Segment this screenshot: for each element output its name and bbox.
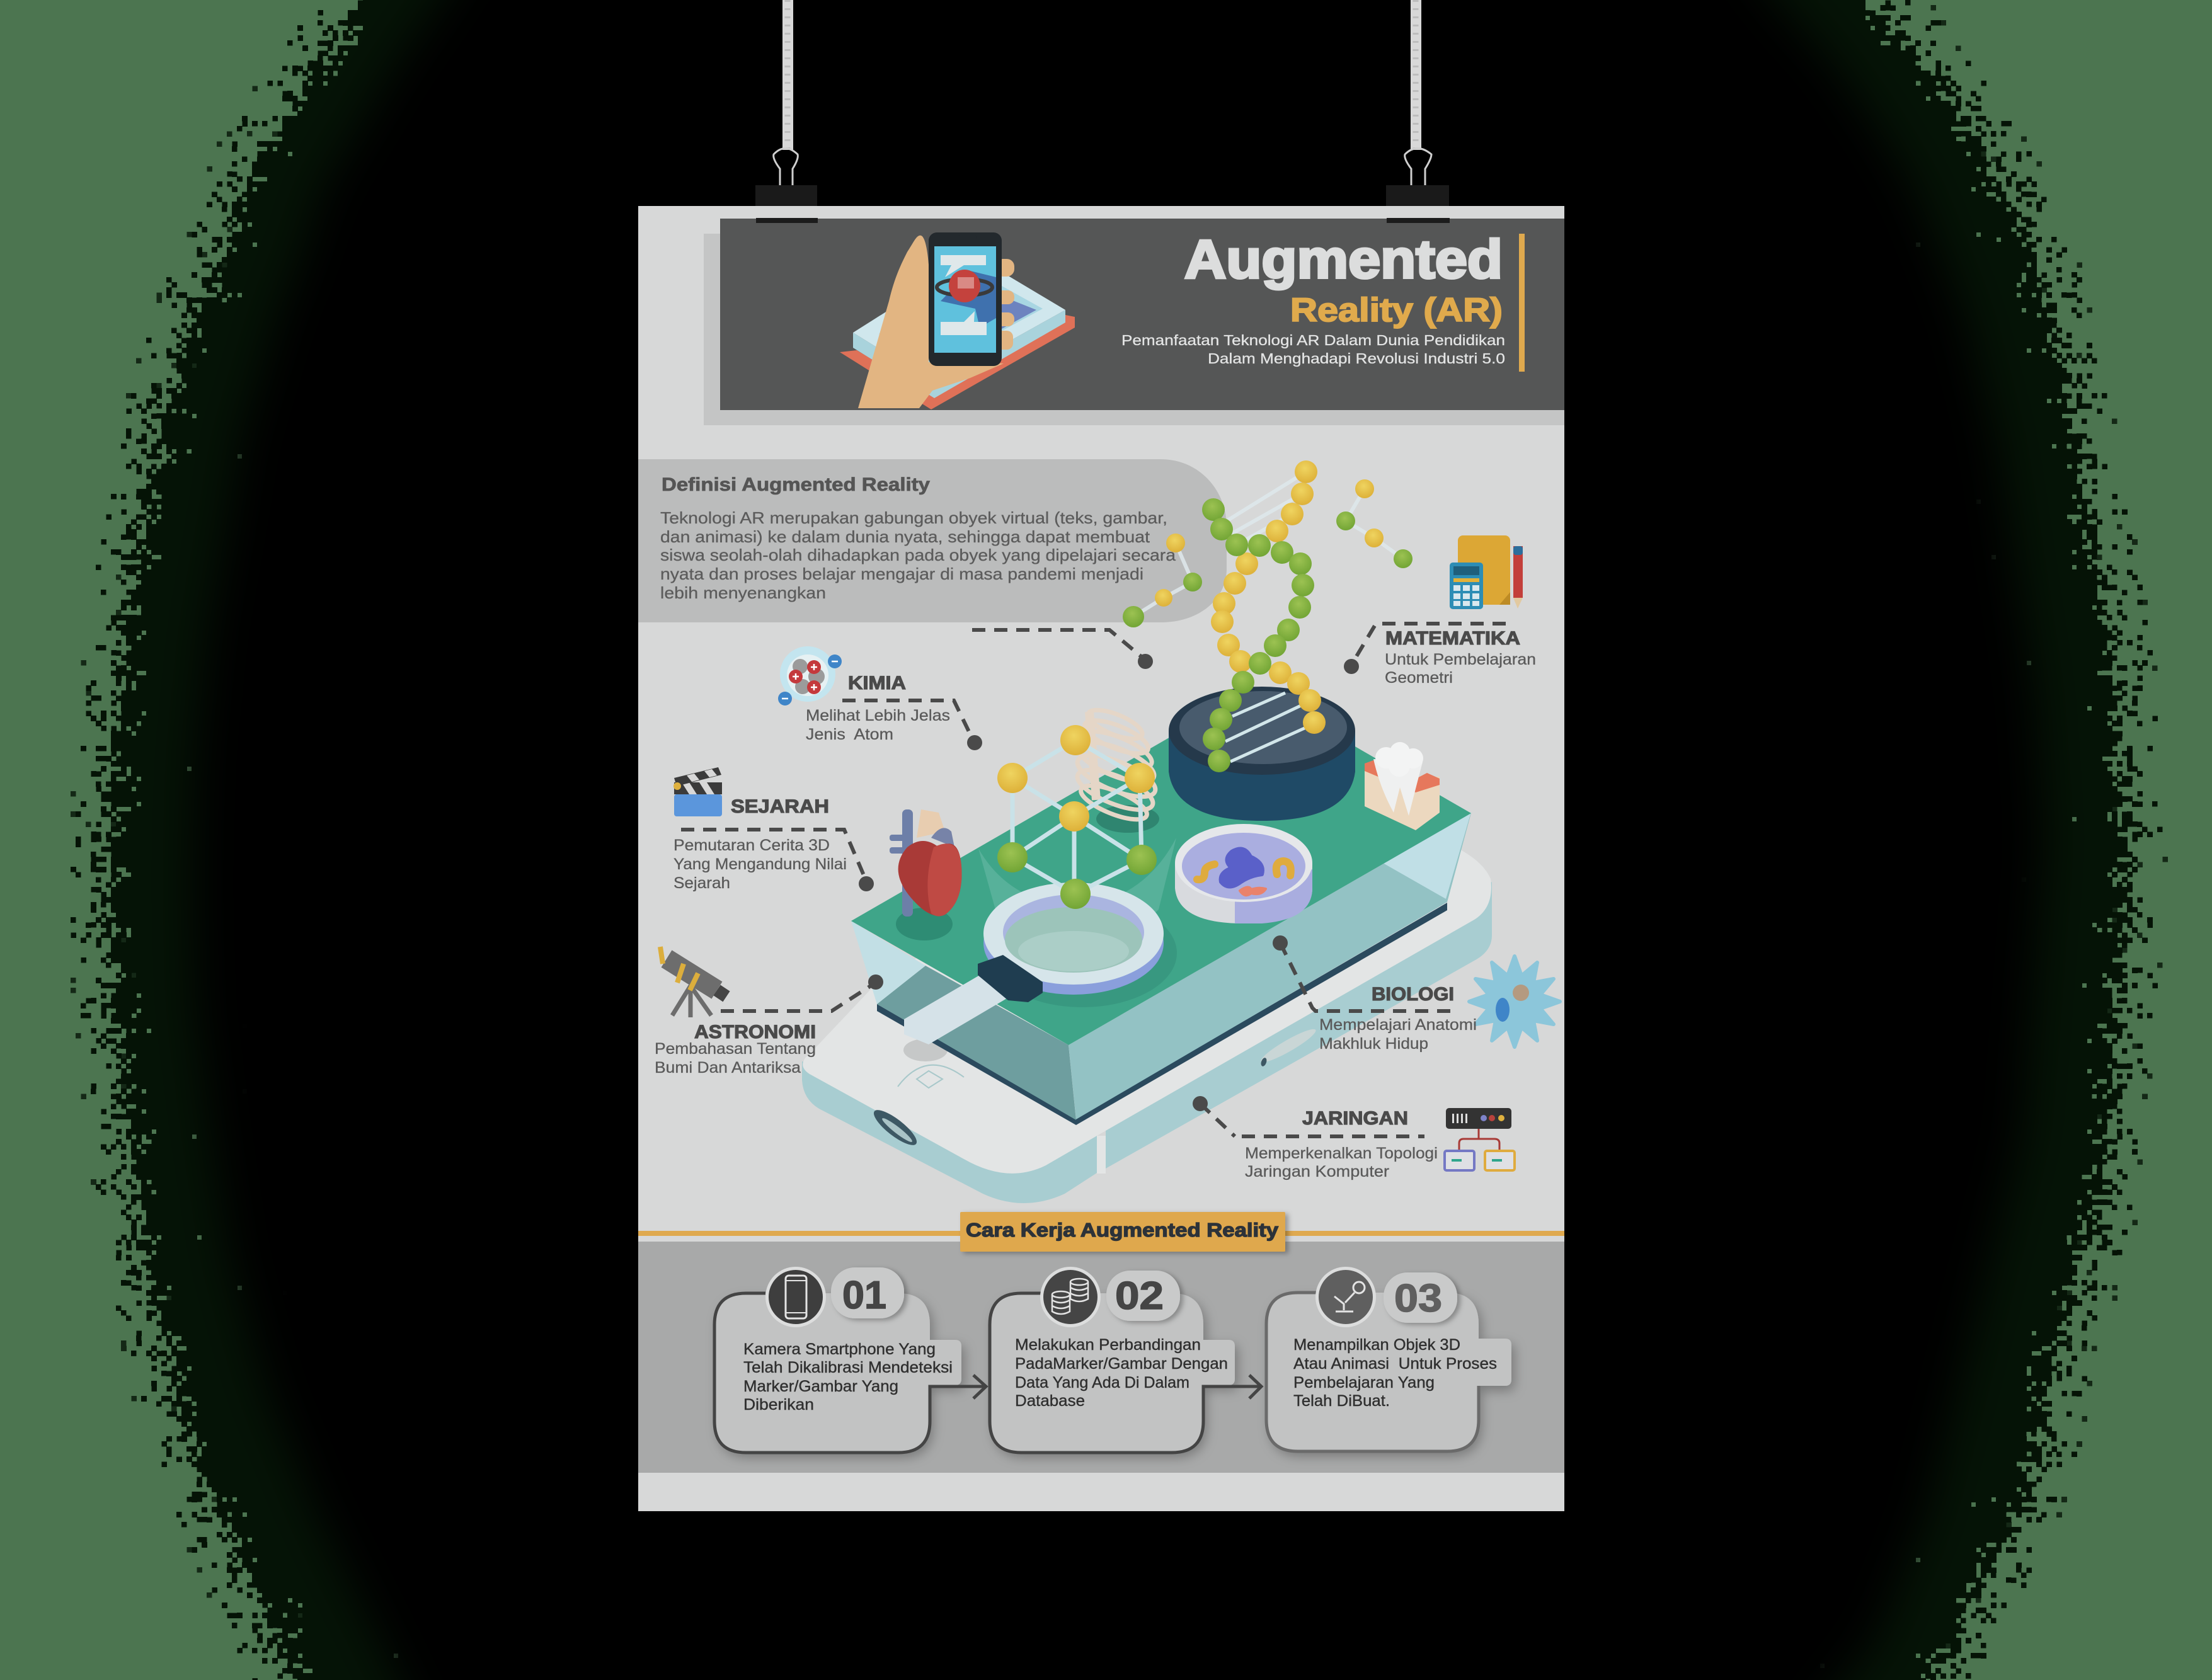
title: Dalam Menghadapi Revolusi Industri 5.0 <box>1208 350 1505 367</box>
icon: amoeba cell <box>1469 956 1560 1047</box>
icon: telescope <box>660 947 726 1017</box>
label: matematika: MATEMATIKA <box>1385 628 1520 649</box>
label: biologi: Makhluk Hidup <box>1319 1035 1428 1053</box>
label: sejarah: Yang Mengandung Nilai <box>673 855 847 873</box>
panel: definition of AR: siswa seolah-olah dihadapkan pada obyek yang dipelajari secara <box>660 546 1176 564</box>
label: astronomi: Pembahasan Tentang <box>655 1040 816 1058</box>
label: sejarah: Sejarah <box>673 874 730 892</box>
poster sheet <box>638 206 1564 1511</box>
smartphone body <box>802 750 1492 1203</box>
tooth <box>1365 742 1440 830</box>
label: jaringan <box>1193 1096 1515 1180</box>
step 1 card: Telah Dikalibrasi Mendeteksi <box>743 1359 953 1376</box>
panel: definition of AR: Teknologi AR merupakan gabungan obyek virtual (teks, gambar, <box>660 508 1167 527</box>
icon: smartphone <box>765 1267 826 1327</box>
step 1 card: Kamera Smartphone Yang <box>743 1340 936 1358</box>
step 2 card <box>990 1267 1261 1453</box>
icon: 3D object projection <box>1315 1267 1376 1327</box>
dark disk base <box>1169 687 1355 821</box>
panel: definition of AR: nyata dan proses belajar mengajar di masa pandemi menjadi <box>660 564 1143 583</box>
panel: definition of AR <box>638 459 1227 622</box>
icon: atom <box>778 646 842 706</box>
panel: how AR works <box>638 1212 1564 1473</box>
magnifying glass <box>904 883 1164 1044</box>
step 3 card <box>1266 1267 1511 1451</box>
label: jaringan: Jaringan Komputer <box>1245 1163 1389 1180</box>
heading badge <box>960 1212 1285 1252</box>
title: Augmented <box>1184 229 1503 290</box>
label: sejarah: Pemutaran Cerita 3D <box>673 837 830 854</box>
label: kimia <box>778 646 982 750</box>
central illustration: isometric smartphone with AR platform <box>802 460 1492 1203</box>
heart <box>890 809 961 917</box>
crystal lattice molecule <box>997 725 1157 909</box>
title <box>1121 229 1505 367</box>
step 2 card: Database <box>1015 1392 1085 1410</box>
step 3 card: Pembelajaran Yang <box>1293 1374 1435 1391</box>
label: jaringan: JARINGAN <box>1302 1108 1408 1129</box>
label: matematika <box>1344 535 1536 687</box>
connector: definition to illustration <box>972 630 1153 669</box>
binder clip feet <box>756 218 1450 223</box>
label: kimia: Melihat Lebih Jelas <box>806 707 950 724</box>
DNA helix and molecules <box>1123 460 1413 772</box>
step 3 card: Atau Animasi Untuk Proses <box>1293 1355 1497 1373</box>
label: biologi <box>1273 935 1560 1053</box>
step 3 card: Menampilkan Objek 3D <box>1293 1336 1460 1354</box>
title: Reality (AR) <box>1290 292 1503 329</box>
step 1 card: Marker/Gambar Yang <box>743 1378 898 1395</box>
icon: math tools <box>1450 535 1523 609</box>
illustration: hand holding phone over book <box>840 232 1075 409</box>
heading badge: Cara Kerja Augmented Reality <box>966 1219 1279 1241</box>
label: kimia: KIMIA <box>848 673 906 694</box>
label: matematika: Untuk Pembelajaran <box>1385 651 1536 668</box>
panel: definition of AR: Definisi Augmented Reality <box>662 474 930 495</box>
label: jaringan: Memperkenalkan Topologi <box>1245 1145 1438 1162</box>
step 2 card: Data Yang Ada Di Dalam <box>1015 1374 1189 1391</box>
title: Pemanfaatan Teknologi AR Dalam Dunia Pendidikan <box>1121 332 1505 348</box>
petri dish <box>1175 824 1312 923</box>
icon: network topology <box>1445 1108 1515 1170</box>
step 2 card: PadaMarker/Gambar Dengan <box>1015 1355 1228 1373</box>
label: kimia: Jenis Atom <box>806 726 893 743</box>
icon: clapperboard <box>673 767 722 816</box>
label: astronomi <box>655 947 883 1077</box>
step 1 card <box>714 1267 986 1453</box>
header band <box>720 218 1564 410</box>
label: biologi: BIOLOGI <box>1372 984 1454 1005</box>
step 3 card: 03 <box>1394 1277 1442 1320</box>
AR platform rising from the screen <box>851 689 1471 1125</box>
label: biologi: Mempelajari Anatomi <box>1319 1016 1477 1034</box>
panel: definition of AR: dan animasi) ke dalam dunia nyata, sehingga dapat membuat <box>660 527 1150 546</box>
icon: database <box>1040 1267 1101 1327</box>
label: sejarah <box>673 767 874 892</box>
step 1 card: 01 <box>842 1274 886 1317</box>
step 2 card: Melakukan Perbandingan <box>1015 1336 1201 1354</box>
step 1 card: Diberikan <box>743 1396 814 1414</box>
label: matematika: Geometri <box>1385 669 1453 687</box>
panel: definition of AR: lebih menyenangkan <box>660 583 826 602</box>
hanging ropes and binder clips <box>755 0 1449 219</box>
label: astronomi: Bumi Dan Antariksa <box>655 1059 801 1077</box>
label: sejarah: SEJARAH <box>731 796 829 817</box>
anatomical ribcage <box>1072 704 1160 826</box>
step 3 card: Telah DiBuat. <box>1293 1392 1390 1410</box>
label: astronomi: ASTRONOMI <box>694 1022 816 1043</box>
step 2 card: 02 <box>1115 1274 1164 1318</box>
